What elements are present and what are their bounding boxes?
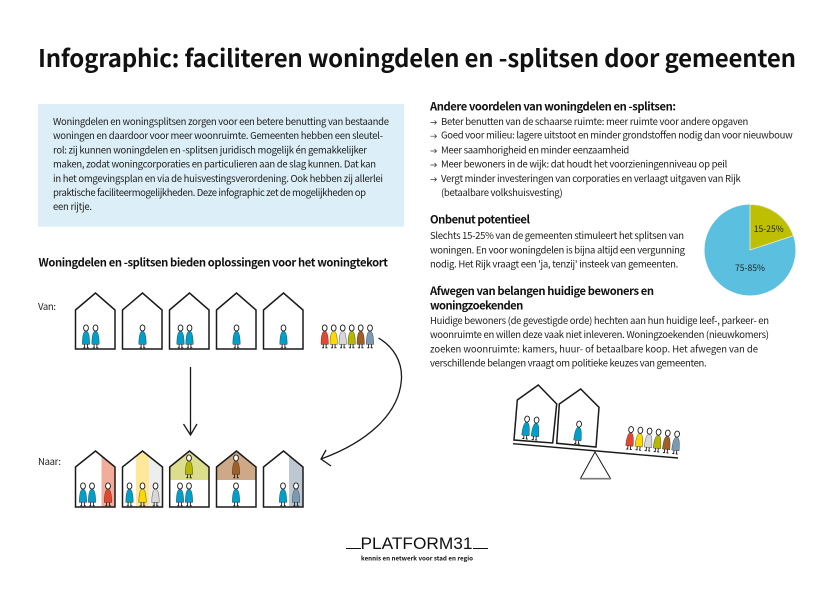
heading: solutions: Woningdelen en -splitsen bieden oplossingen voor het woningtekort xyxy=(38,255,388,271)
label: naar: Naar: xyxy=(38,454,61,468)
beam xyxy=(513,444,678,458)
pie chart: 15-25% xyxy=(754,223,784,235)
arrow bullets xyxy=(430,120,436,181)
text: weighing interests: zoeken woonruimte: kamers, huur- of betaalbare koop. Het afwegen van de xyxy=(430,342,758,356)
house 3 xyxy=(170,293,209,349)
intro text: een rijtje. xyxy=(53,199,92,213)
houses: naar xyxy=(76,451,303,507)
house 5 with blue-grey unit xyxy=(264,451,303,507)
panel: introduction xyxy=(38,104,404,227)
tilted queue xyxy=(625,426,681,454)
tilted houses xyxy=(514,385,599,447)
heading: unused potential: Onbenut potentieel xyxy=(430,211,530,227)
pie chart xyxy=(704,204,796,296)
list: benefits: Vergt minder investeringen van corporaties en verlaagt uitgaven van Rijk xyxy=(441,171,741,185)
intro text: in het omgevingsplan en via de huisvestingsverordening. Ook hebben zij allerlei xyxy=(53,171,383,185)
list: benefits xyxy=(430,114,793,199)
house 2 with yellow and grey units xyxy=(122,451,162,507)
pie chart: 75-85% xyxy=(735,262,765,274)
house 1 xyxy=(76,293,115,349)
text: weighing interests: verschillende belangen vraagt om politieke keuzes van gemeenten. xyxy=(430,356,707,370)
list: benefits: (betaalbare volkshuisvesting) xyxy=(441,185,563,199)
list: benefits: Goed voor milieu: lagere uitstoot en minder grondstoffen nodig dan voor nieuwbouw xyxy=(441,128,793,142)
label: van: Van: xyxy=(38,299,56,313)
house 4 xyxy=(216,293,256,349)
text: unused potential: woningen. En voor woningdelen is bijna altijd een vergunning xyxy=(430,242,686,256)
text: unused potential: Slechts 15-25% van de gemeenten stimuleert het splitsen van xyxy=(430,228,684,242)
logo: Platform31: kennis en netwerk voor stad en regio xyxy=(361,554,473,563)
heading: weighing interests xyxy=(429,283,654,313)
logo: Platform31: PLATFORM31 xyxy=(360,534,472,553)
intro text: rol: zij kunnen woningdelen en -splitsen juridisch mogelijk én gemakkelijker xyxy=(53,142,367,156)
houses: van xyxy=(76,293,303,349)
intro text: maken, zodat woningcorporaties en particulieren aan de slag kunnen. Dat kan xyxy=(53,157,376,171)
intro text: woningen en daardoor voor meer woonruimte. Gemeenten hebben een sleutel- xyxy=(53,128,383,142)
title: Infographic: faciliteren woningdelen en -splitsen door gemeenten xyxy=(38,39,796,74)
balance illustration xyxy=(513,385,681,479)
house 1 with red unit xyxy=(76,451,115,507)
list: benefits: Beter benutten van de schaarse ruimte: meer ruimte voor andere opgaven xyxy=(441,114,748,128)
fulcrum xyxy=(580,452,610,478)
text: weighing interests xyxy=(430,313,769,370)
list: benefits: Meer bewoners in de wijk: dat houdt het voorzieningenniveau op peil xyxy=(441,157,728,171)
logo: Platform31 xyxy=(346,534,488,563)
intro text xyxy=(53,114,389,213)
arrow: curved from queue to houses xyxy=(321,338,402,466)
heading: other benefits: Andere voordelen van woningdelen en -splitsen: xyxy=(429,99,676,115)
house 5 xyxy=(264,293,303,349)
house 3 with olive attic xyxy=(170,451,209,507)
text: unused potential xyxy=(430,228,686,270)
heading: weighing interests: Afwegen van belangen huidige bewoners en xyxy=(429,283,654,299)
text: weighing interests: woonruimte en willen deze vaak niet inleveren. Woningzoekenden (nieuwkomers) xyxy=(430,327,769,341)
arrow: down xyxy=(184,367,197,435)
text: weighing interests: Huidige bewoners (de gevestigde orde) hechten aan hun huidige leef-, parkeer- en xyxy=(430,313,769,327)
text: unused potential: nodig. Het Rijk vraagt een 'ja, tenzij' insteek van gemeenten. xyxy=(430,256,678,270)
heading: weighing interests: woningzoekenden xyxy=(430,297,523,313)
list: benefits: Meer saamhorigheid en minder eenzaamheid xyxy=(441,143,629,157)
intro text: Woningdelen en woningsplitsen zorgen voor een betere benutting van bestaande xyxy=(53,114,389,128)
intro text: praktische faciliteermogelijkheden. Deze infographic zet de mogelijkheden op xyxy=(53,185,366,199)
house 2 xyxy=(122,293,162,349)
queue of house seekers xyxy=(321,325,374,348)
house 4 with brown attic xyxy=(216,451,256,507)
